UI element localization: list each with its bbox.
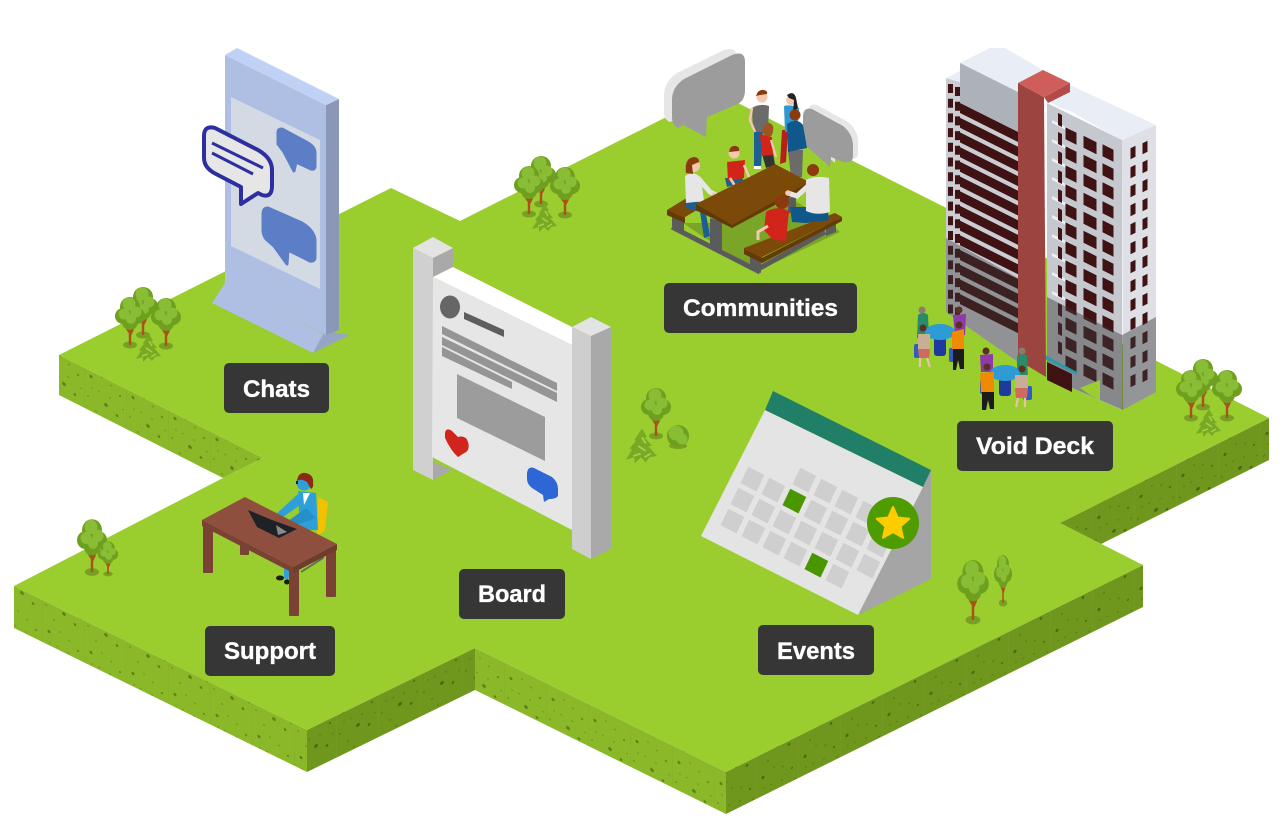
icon: large chat bubble xyxy=(263,208,315,264)
round table xyxy=(999,378,1011,396)
board image block xyxy=(457,374,545,461)
label: Void Deck: Void Deck xyxy=(976,433,1095,460)
icon: outlined message bubble xyxy=(204,127,272,204)
board name bar xyxy=(464,312,504,337)
right block roof xyxy=(1048,85,1156,140)
trees: top centre xyxy=(514,156,580,232)
tower roof xyxy=(960,48,1043,92)
label: Board xyxy=(459,569,565,619)
picnic table top xyxy=(696,164,809,228)
purple resident xyxy=(953,314,966,335)
board front post xyxy=(572,317,611,559)
balcony stripes xyxy=(960,118,1018,323)
board avatar xyxy=(440,296,460,318)
seated child in red xyxy=(758,195,789,241)
icon: blue comment xyxy=(527,468,558,502)
label: Communities: Communities xyxy=(683,295,838,322)
calendar header xyxy=(765,391,931,487)
chair xyxy=(317,497,328,537)
bench support bars xyxy=(672,227,825,272)
void deck residents, second table xyxy=(980,348,1032,410)
calendar side xyxy=(858,470,931,615)
agent body xyxy=(274,473,318,530)
label: Void Deck xyxy=(957,421,1113,471)
front face windows xyxy=(1060,114,1108,387)
ground side: upper left xyxy=(59,355,263,478)
board panel xyxy=(433,267,572,345)
tower upper blank wall xyxy=(960,63,1018,137)
calendar day grid xyxy=(720,446,900,599)
ground side: front centre xyxy=(475,648,726,814)
label: Support xyxy=(205,626,335,676)
tower shaded lower storeys xyxy=(946,238,1018,362)
ground side: front right xyxy=(726,565,1143,814)
label: Board: Board xyxy=(478,581,546,608)
orange resident xyxy=(952,329,964,349)
desk legs xyxy=(203,525,336,616)
standing woman in blue xyxy=(780,93,799,164)
red lift core xyxy=(1018,70,1070,377)
apartment tower xyxy=(946,48,1156,410)
icon: star badge xyxy=(867,497,919,549)
community picnic area xyxy=(664,49,858,273)
trees: left xyxy=(115,287,181,362)
purple resident xyxy=(980,354,993,372)
standing man in navy xyxy=(787,110,807,177)
laptop xyxy=(248,510,297,538)
support desk with agent xyxy=(202,473,337,616)
right bench xyxy=(744,213,842,262)
trees: lower left xyxy=(77,519,118,576)
label: Chats xyxy=(224,363,329,413)
kiosk base xyxy=(212,283,325,353)
trees: lower right xyxy=(957,555,1012,624)
kiosk screen xyxy=(231,97,320,289)
tower left wall xyxy=(946,78,1018,362)
icon: heart xyxy=(445,429,469,457)
standing girl in red xyxy=(760,123,776,168)
trees: right xyxy=(1176,359,1242,437)
orange resident xyxy=(980,372,994,392)
void deck residents, first table xyxy=(914,306,966,370)
seated boy in red xyxy=(725,146,752,189)
board text lines xyxy=(442,326,557,402)
ground side: front left xyxy=(14,586,307,772)
tan resident xyxy=(1015,375,1028,388)
label: Events xyxy=(758,625,874,675)
chats kiosk xyxy=(204,48,350,353)
standing man in grey xyxy=(750,90,769,169)
board back post xyxy=(413,237,453,480)
right block front face xyxy=(1047,103,1122,410)
agent legs and shoes xyxy=(276,565,291,584)
table shadow xyxy=(683,200,840,270)
table legs xyxy=(672,196,836,273)
side face windows xyxy=(1133,142,1145,392)
icon: small chat bubble xyxy=(278,129,315,171)
stools xyxy=(980,380,989,394)
right block side face xyxy=(1122,125,1156,410)
round table xyxy=(934,337,946,356)
label: Communities xyxy=(664,283,857,333)
ground side: upper right xyxy=(1060,418,1269,544)
desk top xyxy=(202,497,337,573)
label: Events: Events xyxy=(777,638,855,665)
ground side: front notch xyxy=(307,648,475,772)
entrance and canopy xyxy=(1045,355,1100,400)
front face sills xyxy=(1052,125,1072,305)
green resident xyxy=(917,313,929,338)
stools xyxy=(914,344,923,358)
tan resident xyxy=(918,334,930,349)
kiosk body xyxy=(225,55,326,335)
trees: centre xyxy=(626,388,689,464)
label: Chats: Chats xyxy=(243,376,310,403)
calendar page xyxy=(701,410,923,615)
left bench xyxy=(667,199,702,223)
notice board xyxy=(413,237,611,559)
seated man in white xyxy=(785,164,830,223)
seated woman in white xyxy=(685,157,717,238)
speech bubble: left xyxy=(664,49,745,137)
chair base xyxy=(301,555,323,572)
events calendar xyxy=(701,391,931,615)
label: Support: Support xyxy=(224,638,316,665)
left wall windows xyxy=(950,84,958,322)
green resident xyxy=(1017,354,1028,378)
speech bubble: right xyxy=(803,105,858,167)
